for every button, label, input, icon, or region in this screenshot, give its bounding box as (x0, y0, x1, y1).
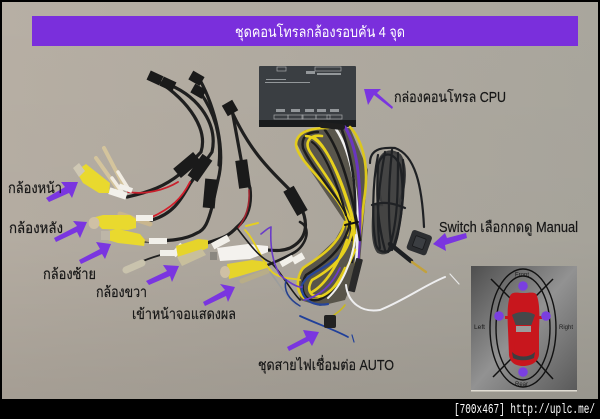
labels: กล้องซ้าย (43, 266, 96, 283)
arrow: manual switch (433, 233, 467, 251)
dark mass under bundle (296, 128, 368, 306)
coiled black switch cable (370, 148, 424, 253)
arrow: rear camera (54, 221, 87, 242)
arrow: front camera (46, 182, 78, 202)
manual switch and audio jack (390, 229, 433, 272)
arrow: right camera (146, 265, 179, 285)
labels: เข้าหน้าจอแสดงผล (132, 306, 236, 323)
inset labels: Front (515, 272, 529, 278)
inset labels: Rear (515, 382, 528, 388)
inset metal background (471, 266, 577, 390)
arrows (46, 89, 467, 351)
arrow: auto wire set (287, 330, 319, 351)
inset labels (474, 272, 573, 388)
inset camera view lines (490, 269, 556, 387)
camera cable connectors (147, 71, 308, 216)
arrow: left camera (79, 242, 111, 264)
labels: ชุดสายไฟเชื่อมต่อ AUTO (258, 355, 394, 374)
inset labels: Left (474, 325, 485, 331)
arrow: control box (364, 89, 393, 109)
arrow: display input (203, 284, 235, 306)
control box CPU (259, 66, 356, 127)
yellow RCA connectors (73, 163, 268, 279)
labels: กล้องขวา (96, 284, 147, 301)
title banner (32, 16, 578, 46)
inset: camera positions diagram (471, 266, 577, 392)
inset camera dots (494, 281, 551, 377)
inset labels: Right (559, 325, 573, 331)
main wire bundle (237, 125, 459, 342)
white labels on cables (108, 184, 305, 267)
labels (8, 88, 578, 374)
labels: Switch เลือกกดดู Manual (439, 219, 578, 236)
title banner: ชุดคอนโทรลกล้องรอบคัน 4 จุด (235, 23, 405, 42)
wiring harness: camera cables (96, 80, 307, 281)
labels: กล่องคอนโทรล CPU (394, 88, 506, 106)
labels: กล้องหน้า (8, 180, 62, 197)
inset red car (505, 293, 542, 366)
labels: กล้องหลัง (9, 220, 63, 237)
